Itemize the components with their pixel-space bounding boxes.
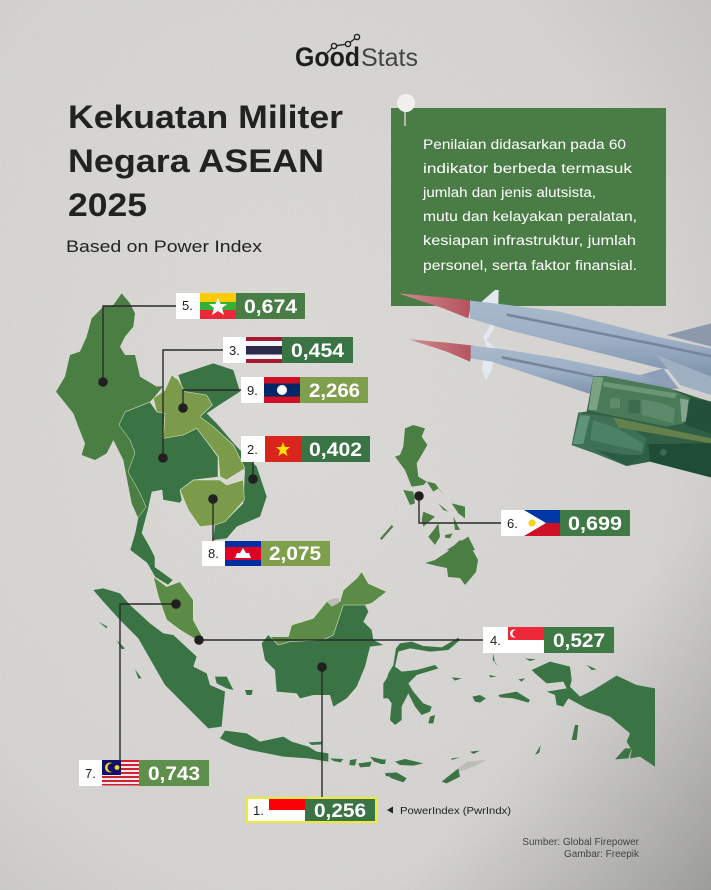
- country: Cambodia: [180, 480, 244, 527]
- panel: methodology note: [391, 108, 666, 306]
- label: Vietnam 0,402: [241, 436, 370, 462]
- title: [68, 99, 343, 223]
- leader lines: [103, 306, 501, 797]
- label: Cambodia 2,075: [202, 541, 330, 566]
- label: Vietnam 0,402: 0,402: [309, 440, 362, 461]
- panel: methodology note: jumlah dan jenis alutsista,: [422, 185, 596, 200]
- country: Thailand: [119, 402, 218, 585]
- label: Cambodia 2,075: 2,075: [269, 544, 321, 565]
- country: Philippines: [380, 425, 475, 550]
- country: Timor-Leste: [458, 760, 487, 772]
- country: Peninsular Malaysia: [153, 577, 203, 640]
- label: Philippines 0,699: [501, 510, 630, 536]
- missile bodies: [398, 290, 711, 395]
- label: Myanmar 0,674: 0,674: [244, 297, 297, 318]
- logo: GoodStats: Good: [295, 42, 360, 72]
- map region: Indochina east: [153, 363, 267, 540]
- logo: GoodStats: [295, 34, 418, 72]
- label: Laos 2,266: [241, 377, 368, 403]
- label: Indonesia 0,256: 0,256: [314, 801, 366, 822]
- panel: methodology note: personel, serta faktor finansial.: [423, 258, 637, 273]
- country: Laos: [153, 375, 245, 480]
- panel: methodology note: kesiapan infrastruktur, jumlah: [423, 233, 636, 248]
- title: Negara ASEAN: [68, 143, 324, 179]
- source note: Gambar: Freepik: [564, 849, 640, 860]
- source note: [522, 837, 640, 860]
- island: Papua: [532, 662, 655, 767]
- label: Thailand 0,454: 3.: [229, 343, 240, 358]
- label: Singapore 0,527: 4.: [490, 633, 501, 648]
- country: Java and nearby islands: [98, 622, 390, 777]
- location dots: [98, 377, 424, 672]
- country: Myanmar: [56, 293, 163, 518]
- panel: methodology note: indikator berbeda termasuk: [423, 161, 632, 176]
- label: Malaysia 0,743: [79, 760, 209, 786]
- label: Singapore 0,527: 0,527: [553, 631, 605, 652]
- map region: eastern Indonesia: [380, 638, 655, 783]
- island: Sulawesi: [383, 638, 460, 725]
- label: Laos 2,266: 9.: [247, 383, 258, 398]
- map region: Malaysia and western Indonesia: [93, 572, 390, 777]
- label: Singapore 0,527: [483, 627, 614, 653]
- country: Borneo Indonesia: [262, 605, 383, 707]
- islands: Maluku and Nusa Tenggara: [380, 653, 632, 783]
- title: Kekuatan Militer: [68, 99, 343, 135]
- label: Thailand 0,454: 0,454: [291, 341, 344, 362]
- panel: methodology note: Penilaian didasarkan pada 60: [423, 137, 626, 152]
- subtitle: Based on Power Index: [66, 237, 263, 256]
- country: Vietnam: [178, 363, 267, 540]
- label: Vietnam 0,402: 2.: [247, 442, 258, 457]
- label: Philippines 0,699: 0,699: [568, 514, 622, 535]
- icon: pushpin: [397, 94, 415, 126]
- label: Indonesia 0,256: 1.: [253, 803, 264, 818]
- launcher: [572, 376, 711, 477]
- country: Brunei: [327, 598, 340, 607]
- label: Malaysia 0,743: 7.: [85, 766, 96, 781]
- label: Cambodia 2,075: 8.: [208, 546, 219, 561]
- label: Laos 2,266: 2,266: [309, 381, 360, 402]
- source note: Sumber: Global Firepower: [522, 837, 640, 848]
- label: Myanmar 0,674: [176, 293, 305, 319]
- label: Indonesia 0,256: [246, 797, 377, 823]
- country: Malaysian Borneo: [270, 572, 387, 645]
- map: Southeast Asia: [56, 293, 655, 783]
- legend: PowerIndex: PowerIndex (PwrIndx): [400, 805, 511, 817]
- label: Philippines 0,699: 6.: [507, 516, 518, 531]
- label: Malaysia 0,743: 0,743: [148, 764, 200, 785]
- country: Sumatra: [93, 588, 225, 728]
- illustration: missile launcher: [398, 290, 711, 477]
- logo: GoodStats: Stats: [361, 44, 418, 72]
- label: Thailand 0,454: [223, 337, 353, 363]
- label: Myanmar 0,674: 5.: [182, 298, 193, 313]
- panel: methodology note: mutu dan kelayakan peralatan,: [423, 209, 637, 224]
- country: Mindanao: [425, 540, 478, 585]
- title: 2025: [68, 187, 147, 223]
